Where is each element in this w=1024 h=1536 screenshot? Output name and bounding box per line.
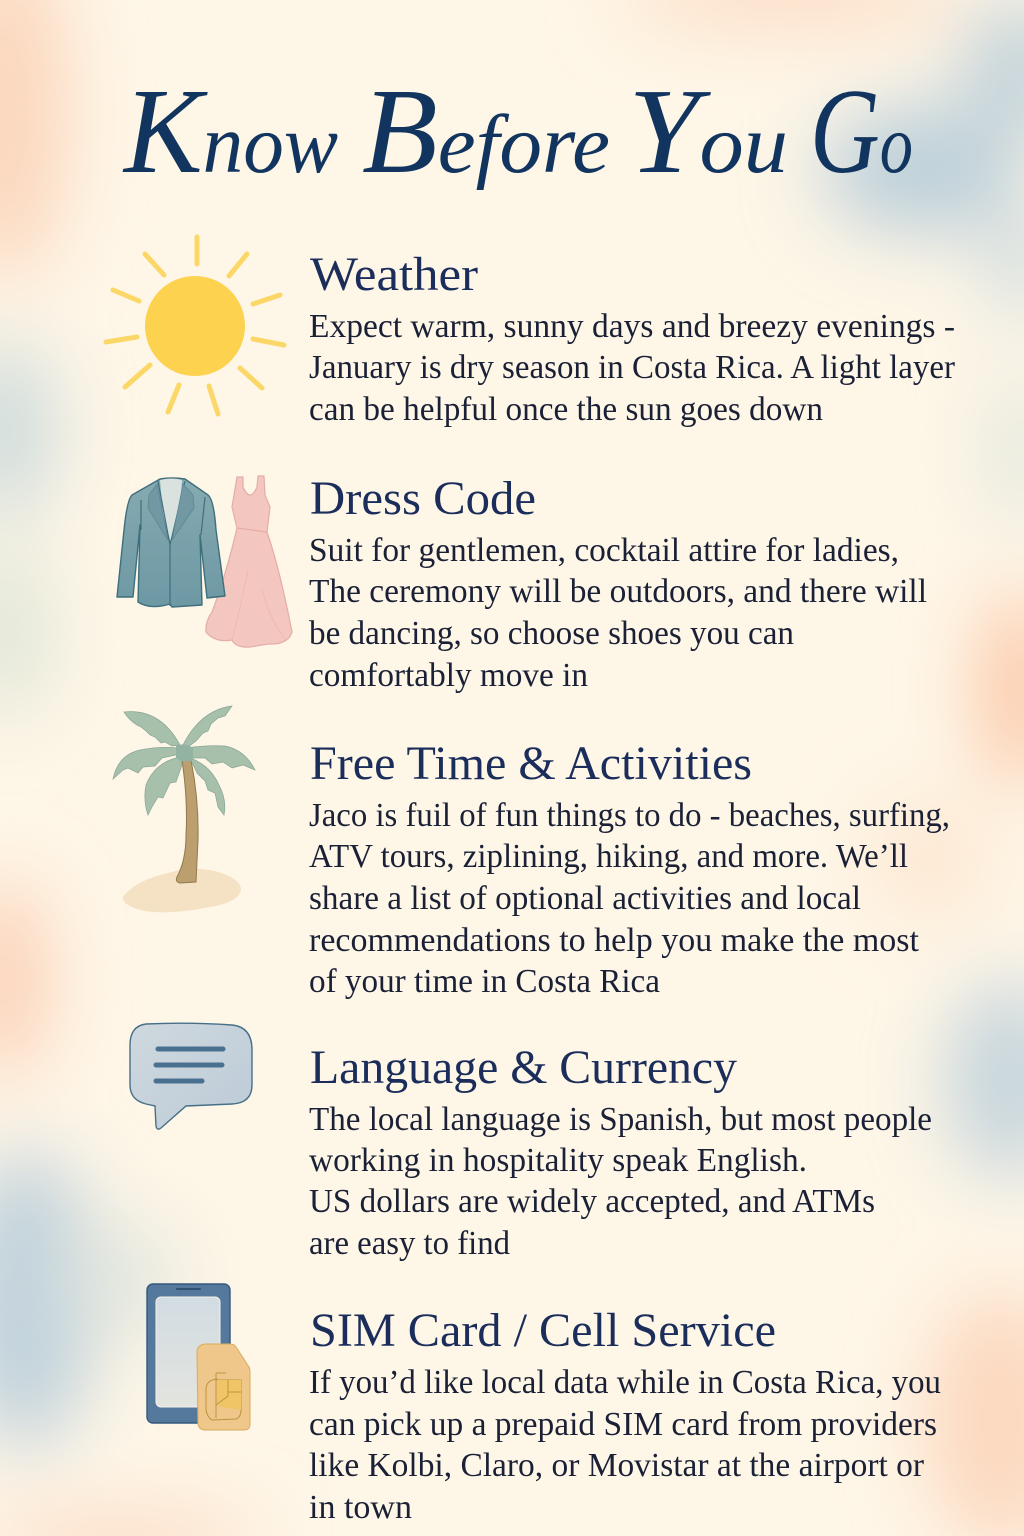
text: SIM card details: If you’d like local data while in Costa Rica, you <box>309 1364 941 1401</box>
text: free time details: share a list of optional activities and local <box>309 880 861 917</box>
icon: phone with SIM card <box>147 1284 250 1430</box>
section: weather <box>106 237 956 428</box>
text: dress code details <box>309 532 927 694</box>
text: free time details <box>309 797 950 1000</box>
text: free time details: of your time in Costa Rica <box>309 963 660 1000</box>
heading: dress code: Dress Code <box>310 472 536 525</box>
text: weather details: Expect warm, sunny days and breezy evenings - <box>309 308 955 345</box>
title: Go <box>810 64 913 199</box>
title <box>122 64 913 199</box>
SIM card <box>197 1344 250 1430</box>
heading: weather: Weather <box>310 248 478 301</box>
text: weather details: can be helpful once the sun goes down <box>309 391 823 428</box>
title: You <box>628 64 788 199</box>
heading: SIM card and cell service: SIM Card / Cell Service <box>310 1304 776 1357</box>
text: language details: are easy to find <box>309 1225 510 1262</box>
section: SIM card and cell service <box>147 1284 941 1526</box>
fronds <box>113 706 255 815</box>
title: Know <box>122 64 338 199</box>
icon: speech bubble <box>130 1023 252 1129</box>
icon: dress <box>206 476 292 647</box>
text: language details: working in hospitality speak English. <box>309 1142 807 1179</box>
text: SIM card details: can pick up a prepaid SIM card from providers <box>309 1406 937 1443</box>
text: free time details: Jaco is fuil of fun things to do - beaches, surfing, <box>309 797 950 834</box>
text: SIM card details: like Kolbi, Claro, or Movistar at the airport or <box>309 1447 925 1484</box>
icon: palm tree on island <box>113 706 255 912</box>
heading: free time and activities: Free Time & Activities <box>310 737 752 790</box>
text: weather details: January is dry season in Costa Rica. A light layer <box>309 349 956 386</box>
text: free time details: ATV tours, ziplining, hiking, and more. We’ll <box>309 838 908 875</box>
heading: language and currency: Language & Currency <box>310 1041 737 1094</box>
text: dress code details: be dancing, so choose shoes you can <box>309 615 794 652</box>
section: free time and activities <box>113 706 950 1000</box>
icon: suit and dress <box>117 476 292 647</box>
title: Before <box>362 64 610 199</box>
text: free time details: recommendations to help you make the most <box>309 922 920 959</box>
text: dress code details: comfortably move in <box>309 657 588 694</box>
text: weather details <box>309 308 956 428</box>
text: SIM card details: in town <box>309 1489 412 1526</box>
section: dress code <box>117 472 927 694</box>
island <box>123 869 241 912</box>
icon: suit jacket <box>117 478 225 607</box>
text: SIM card details <box>309 1364 941 1526</box>
text: language details: US dollars are widely accepted, and ATMs <box>309 1183 875 1220</box>
text: language details: The local language is Spanish, but most people <box>309 1101 932 1138</box>
text: dress code details: Suit for gentlemen, cocktail attire for ladies, <box>309 532 899 569</box>
palm crown <box>176 744 193 762</box>
phone <box>147 1284 230 1423</box>
icon: sun <box>106 237 284 414</box>
trunk <box>176 760 198 883</box>
text: dress code details: The ceremony will be outdoors, and there will <box>309 573 927 610</box>
section: language and currency <box>130 1023 932 1262</box>
text: language details <box>309 1101 932 1262</box>
